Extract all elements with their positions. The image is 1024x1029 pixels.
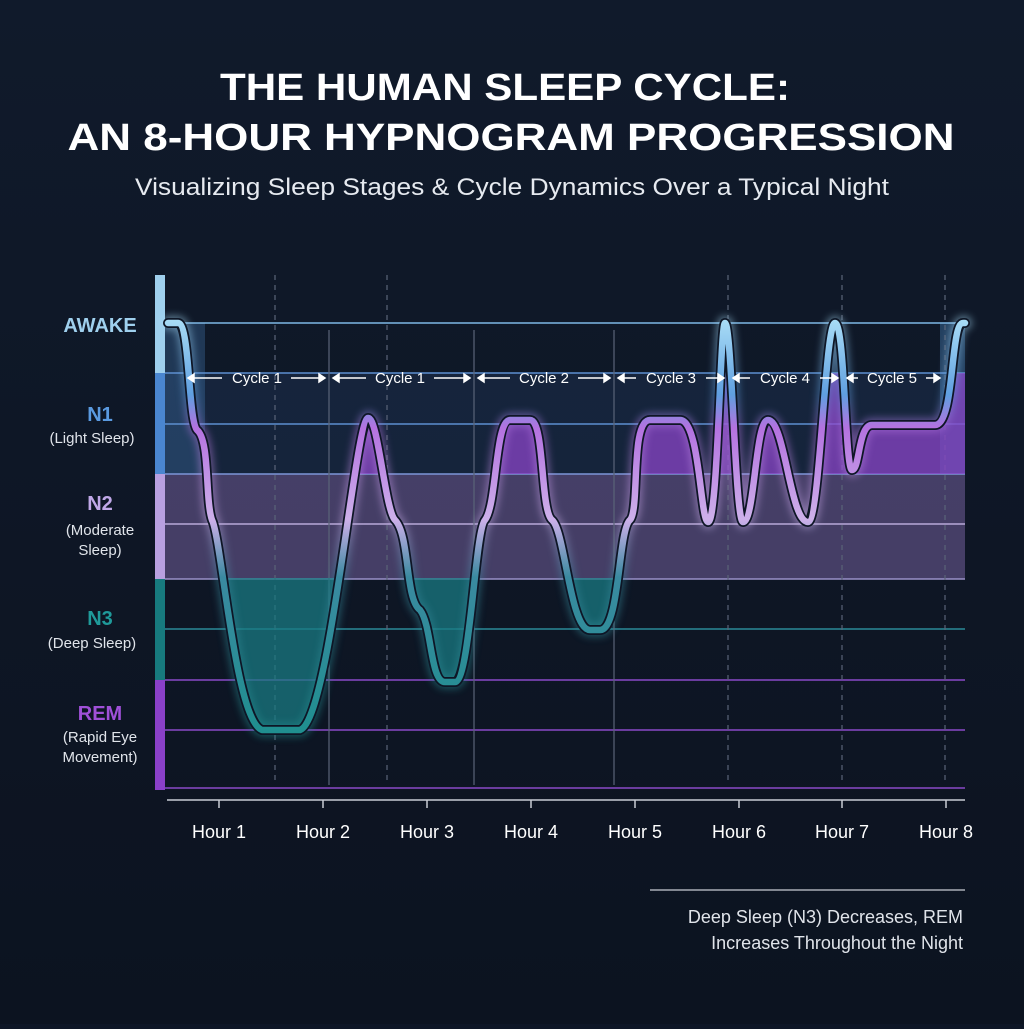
stage labels: Sleep)	[78, 542, 122, 559]
N1 band	[165, 373, 965, 474]
subtitle: Visualizing Sleep Stages & Cycle Dynamics Over a Typical Night	[135, 174, 889, 201]
x axis: Hour 1	[192, 822, 246, 842]
title: AN 8-HOUR HYPNOGRAM PROGRESSION	[68, 117, 954, 159]
stage labels: REM	[78, 703, 122, 725]
stage labels: (Rapid Eye	[63, 729, 137, 746]
cycle labels: Cycle 5	[867, 370, 917, 387]
stage labels: (Light Sleep)	[49, 430, 135, 447]
footnote	[650, 890, 965, 953]
x axis: Hour 7	[815, 822, 869, 842]
x axis: Hour 5	[608, 822, 662, 842]
cycle labels: Cycle 4	[760, 370, 810, 387]
footnote: Increases Throughout the Night	[711, 933, 963, 953]
stage labels	[48, 315, 138, 766]
x axis: Hour 3	[400, 822, 454, 842]
cycle labels: Cycle 3	[646, 370, 696, 387]
stage labels: N3	[87, 608, 113, 630]
stage labels: AWAKE	[63, 315, 137, 337]
x axis	[167, 800, 973, 842]
stage labels: N1	[87, 404, 113, 426]
footnote: Deep Sleep (N3) Decreases, REM	[688, 907, 963, 927]
x axis: Hour 6	[712, 822, 766, 842]
x axis: Hour 2	[296, 822, 350, 842]
stage color bar	[155, 275, 165, 790]
stage labels: Movement)	[62, 749, 138, 766]
title	[68, 67, 954, 159]
stage labels: N2	[87, 493, 113, 515]
cycle labels: Cycle 1	[232, 370, 282, 387]
cycle labels: Cycle 1	[375, 370, 425, 387]
stage labels: (Moderate	[66, 522, 134, 539]
cycle labels	[232, 370, 917, 387]
fills under curve	[192, 373, 965, 732]
N2 band	[165, 474, 965, 579]
x axis: Hour 4	[504, 822, 558, 842]
cycle labels: Cycle 2	[519, 370, 569, 387]
x axis: Hour 8	[919, 822, 973, 842]
hypnogram curve	[168, 323, 965, 730]
title: THE HUMAN SLEEP CYCLE:	[220, 67, 790, 109]
stage labels: (Deep Sleep)	[48, 635, 136, 652]
hypnogram chart	[155, 275, 965, 790]
